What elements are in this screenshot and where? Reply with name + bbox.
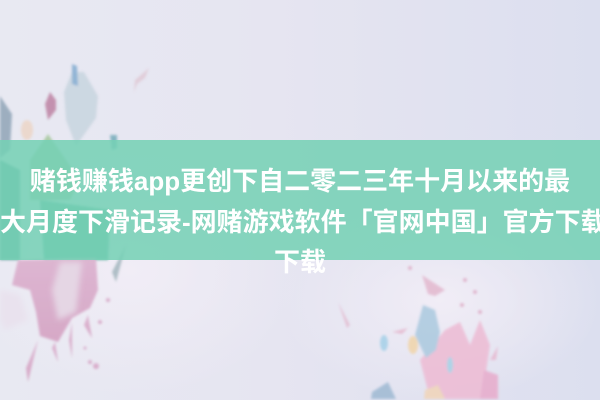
left gems bbox=[0, 64, 149, 282]
left pink splash bbox=[12, 258, 110, 382]
title text bbox=[0, 166, 600, 277]
right gems and pink splash bbox=[338, 266, 498, 399]
title text: 下载 bbox=[274, 247, 326, 277]
title text: 大月度下滑记录-网赌游戏软件「官网中国」官方下载 bbox=[0, 206, 600, 236]
title text: 赌钱赚钱app更创下自二零二三年十月以来的最 bbox=[30, 166, 570, 196]
title banner bbox=[0, 140, 600, 260]
